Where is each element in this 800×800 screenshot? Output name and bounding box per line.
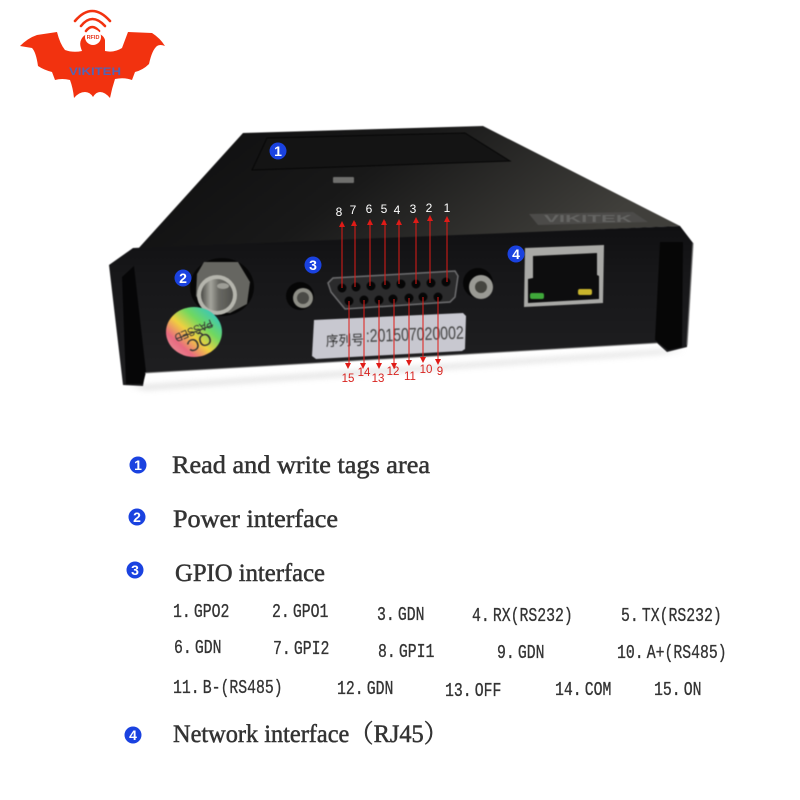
legend item 2: 2 (133, 509, 141, 525)
GPIO pin list: 11. B-(RS485) (173, 679, 283, 700)
left screw (286, 282, 314, 310)
callout 1 on photo (270, 142, 286, 160)
top pin numbers (336, 201, 451, 219)
RFID signal waves (75, 11, 110, 31)
right recess (655, 242, 683, 350)
callout 3 on photo (304, 256, 322, 274)
bottom pin numbers: 15 (342, 373, 354, 385)
GPIO pin list: 3. GDN (377, 606, 425, 627)
top pin numbers: 5 (381, 202, 388, 216)
GPIO pin list: 8. GPI1 (378, 643, 434, 664)
legend item 4: 4 (129, 727, 137, 743)
GPIO pin list: 6. GDN (174, 639, 222, 660)
GPIO pin list: 12. GDN (337, 680, 393, 701)
top pin numbers: 1 (444, 201, 451, 215)
bottom pin arrows (345, 297, 441, 369)
top pin numbers: 8 (336, 205, 343, 219)
GPIO pin list: 13. OFF (445, 682, 501, 703)
brand plate (529, 212, 648, 225)
legend item 3: GPIO interface (175, 560, 325, 587)
bottom pin numbers: 11 (404, 371, 416, 383)
legend item 2: Power interface (173, 506, 338, 533)
serial number label (312, 313, 466, 359)
top pin numbers: 7 (350, 203, 357, 217)
RFID badge (85, 29, 101, 45)
brand name: VIKITEH (69, 66, 121, 78)
top surface (137, 126, 680, 250)
GPIO pin list: 10. A+(RS485) (617, 644, 727, 665)
right edge highlight (687, 243, 693, 345)
GPIO pin list: 4. RX(RS232) (472, 607, 573, 628)
GPIO pin list: 5. TX(RS232) (621, 607, 722, 628)
bottom pin numbers: 13 (372, 373, 384, 385)
callout 4 on photo: 4 (512, 246, 520, 262)
bottom pin numbers: 12 (387, 366, 399, 378)
GPIO pin list (173, 603, 727, 703)
GPIO pin list: 15. ON (654, 681, 702, 702)
legend item 1: 1 (134, 457, 142, 473)
top pin numbers: 6 (366, 202, 373, 216)
top pin numbers: 4 (394, 203, 401, 217)
DB15 connector (328, 271, 458, 309)
bottom pin numbers: 14 (358, 367, 371, 379)
callout 4 on photo (508, 246, 524, 262)
device photo (109, 126, 693, 390)
green LED (530, 293, 544, 299)
top pin numbers: 3 (410, 202, 417, 216)
QC sticker (166, 307, 222, 357)
legend item 4: Network interface（RJ45） (173, 720, 448, 748)
RJ45 port (524, 245, 604, 307)
legend item 1: Read and write tags area (172, 452, 430, 479)
bottom pin numbers (342, 364, 443, 385)
read and write tag recess (252, 133, 510, 170)
legend item 3: 3 (131, 562, 139, 578)
callout 3 on photo: 3 (309, 257, 317, 273)
left recess (122, 266, 146, 384)
power connector (190, 258, 254, 316)
ground shadow (130, 350, 685, 390)
GPIO pin list: 2. GPO1 (272, 603, 328, 624)
front face (109, 226, 693, 386)
callout 2 on photo: 2 (179, 270, 187, 286)
right screw (463, 268, 493, 299)
logo: Vikitek RFID bat (20, 11, 165, 98)
bottom pin numbers: 10 (420, 364, 432, 376)
bottom highlight (145, 343, 657, 373)
bottom pin numbers: 9 (437, 366, 443, 378)
bat silhouette (20, 32, 165, 98)
top pin arrows (339, 215, 450, 288)
serial number label: 序列号 (325, 330, 364, 351)
GPIO pin list: 7. GPI2 (273, 640, 329, 661)
QC sticker: QC (184, 328, 215, 356)
serial number label: :201507020002 (365, 323, 464, 346)
indicator light (333, 177, 354, 183)
brand plate: VIKITEK (544, 214, 634, 225)
yellow LED (578, 289, 592, 295)
RFID text: RFID (87, 35, 99, 41)
callout 1 on photo: 1 (274, 143, 282, 159)
top pin numbers: 2 (426, 201, 433, 215)
GPIO pin list: 1. GPO2 (173, 603, 229, 624)
callout 2 on photo (174, 270, 192, 286)
GPIO pin list: 14. COM (555, 681, 611, 702)
GPIO pin list: 9. GDN (497, 644, 545, 665)
QC sticker: PASSED (172, 316, 215, 345)
